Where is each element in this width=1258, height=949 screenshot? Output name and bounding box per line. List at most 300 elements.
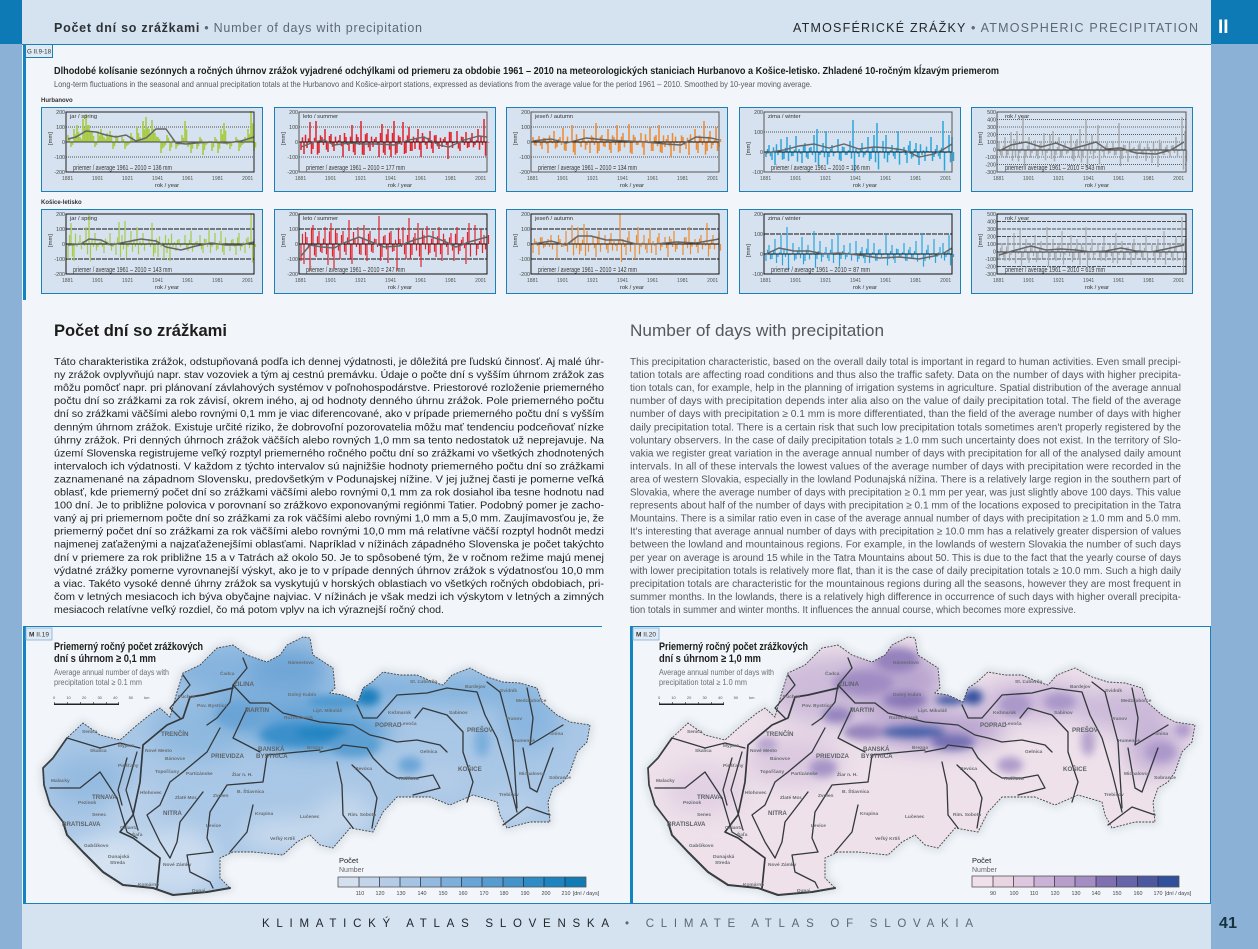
legend: number of days purple: Počet: [972, 856, 992, 865]
map place names: Zlaté Mor.: [780, 795, 802, 801]
chart: Hurbanovo annual: -300: [985, 170, 996, 176]
left margin band: [0, 44, 22, 949]
map place names: Lipt. Mikuláš: [313, 708, 342, 714]
chart: Hurbanovo annual: 300: [987, 125, 996, 131]
chart section strip: [23, 44, 26, 300]
text block: English body: precipitation totals are characteristic for the mountainous regions during all the seasons, however they are most frequent in: [630, 579, 1181, 590]
chart section title: Dlhodobé kolísanie sezónnych a ročných úhrnov zrážok vyjadrené odchýlkami od priemeru za obdobie 1961 – 2010 na meteorologických staniciach Hurbanovo a Košice-letisko. Zhladené 10-ročným kĺzavým priemerom: [54, 63, 999, 77]
chart: Kosice annual: [mm]: [978, 234, 984, 247]
chart: Kosice annual: 400: [987, 220, 996, 226]
map place names: Levice: [811, 823, 826, 829]
map place names: Bánovce: [165, 756, 185, 762]
map place names: Dolný Kubín: [893, 692, 921, 698]
map place names: Senec: [92, 812, 106, 818]
text block: Slovak body: zaznamenané na západnom Slovensku, predovšetkým v Podunajskej nížine. V jej južnej časti je pomerne veľká: [54, 474, 604, 485]
chart: Hurbanovo winter: [mm]: [746, 142, 752, 155]
text block: English body: This precipitation characteristic, based on the overall daily total is important in regard to human activities. Even small precipi-: [630, 357, 1181, 368]
text block: Slovak body: úhrny zrážok. Pri denných úhrnoch zrážok väčších alebo rovných 1,0 mm sa tento nedostatok už neprejavuje. Na: [54, 435, 604, 446]
chart: Hurbanovo annual: 0: [993, 148, 996, 154]
legend: number of days purple: [dní / days]: [1165, 891, 1192, 897]
map place names: Námestovo: [288, 660, 314, 666]
text block: Slovak body: priemerný počet dní so zrážkami za rok väčšími alebo rovnými 10,0 mm má relatívne väčší rozptyl hodnôt medzi: [54, 527, 604, 538]
chart: Kosice annual: 0: [993, 250, 996, 256]
legend: number of days purple: 170: [1154, 891, 1162, 897]
map: Slovakia purple field: [648, 637, 1195, 895]
map place names: Čadca: [220, 670, 235, 677]
map place names: Skalica: [695, 748, 712, 754]
map place names: Hlohovec: [745, 790, 767, 796]
map place names: Bánovce: [770, 756, 790, 762]
chart: Kosice annual: 1881 1901 1921 1941 1961 1981 2001: [993, 278, 1184, 284]
chart: Kosice autumn: 1881 1901 1921 1941 1961 1981 2001: [527, 278, 718, 284]
chart: Hurbanovo spring: 1881 1901 1921 1941 1961 1981 2001: [62, 176, 253, 182]
map place names: Krupina: [860, 811, 878, 817]
chart: Kosice autumn: -200: [519, 272, 530, 278]
text block: Slovak body: ny zrážok ovplyvňujú napr. stav vozoviek a tým aj cestnú premávku. Údaje o počte dní s vyšším úhrnom zrážok zas: [54, 368, 604, 381]
map place names: Bardejov: [1070, 684, 1091, 690]
map place names: NITRA: [163, 810, 182, 817]
chart: Kosice autumn: 0: [527, 242, 530, 248]
chart: Hurbanovo annual: 500: [987, 110, 996, 116]
chart: Hurbanovo annual: 100: [987, 140, 996, 146]
chart: Kosice autumn: priemer / average 1961 – 2010 = 142 mm: [538, 267, 637, 274]
legend: number of days blue: 170: [480, 891, 488, 897]
map place names: Dunajská: [108, 854, 130, 860]
map place names: BYSTRICA: [256, 753, 288, 760]
text block: Slovak body: oblasť, kde priemerný počet dní so zrážkami väčšími alebo rovnými 0,1 mm za rok dosiahol iba tesne hodnotu nad: [54, 488, 604, 498]
chart: Kosice annual: 100: [987, 242, 996, 248]
chart: Kosice summer: 100: [289, 227, 298, 233]
chart: Hurbanovo spring: [42, 108, 262, 192]
map place names: KOŠICE: [458, 765, 482, 773]
chart: Hurbanovo annual: -100: [985, 155, 996, 161]
chart: Kosice winter: [mm]: [746, 244, 752, 257]
chart: Hurbanovo summer: 0: [295, 140, 298, 146]
chart: Kosice spring: 100: [56, 227, 65, 233]
map place names: Nové Zámky: [768, 862, 797, 868]
text block: English body: [629, 357, 1182, 616]
map subtitle second line: precipitation total ≥ 0.1 mm: [54, 678, 142, 687]
chapter number: II: [1218, 17, 1229, 38]
map place names: Gelnica: [1025, 749, 1043, 755]
map place names: Gabčíkovo: [84, 843, 109, 849]
chart: Hurbanovo spring: priemer / average 1961 – 2010 = 136 mm: [73, 165, 172, 172]
chart: Kosice winter: -100: [752, 272, 763, 278]
chart: Kosice annual: priemer / average 1961 – 2010 = 619 mm: [1005, 267, 1105, 274]
header band: [0, 0, 1258, 45]
chart: Hurbanovo autumn: -100: [519, 155, 530, 161]
map panel frames: [23, 626, 1211, 904]
chart: Kosice winter: 0: [760, 252, 763, 258]
text block: Slovak body: Táto charakteristika zrážok, odstupňovaná podľa ich dennej výdatnosti, je dôležitá pre ľudskú činnosť. Aj malé úhr-: [54, 357, 604, 368]
map place names: Rožňava: [399, 776, 419, 782]
chart: Hurbanovo winter: 200: [754, 110, 763, 116]
map title second line: dní s úhrnom ≥ 0,1 mm: [54, 653, 156, 665]
heading: Slovak text: Počet dní so zrážkami: [54, 322, 227, 340]
text block: Slovak body: čom v letných mesiacoch ich býva obyčajne najviac. V nížinách je však medzi ich výskytom v letných a zimných: [54, 592, 604, 603]
map place names: Svidník: [500, 688, 517, 694]
map place names: Humenné: [513, 738, 535, 744]
text block: English body: with lower precipitation totals is relatively more flat, than it is the case of daily precipitation totals ≥ 10.0 mm. Such a high daily: [629, 566, 1181, 577]
text block: English body: area of western Slovakia, especially in the lowland Podunajská nížina. There is a relatively large region in the southern part of: [630, 474, 1181, 485]
chart: Kosice spring: [mm]: [48, 234, 54, 247]
map place names: POPRAD: [980, 722, 1007, 729]
chart: Kosice autumn: 200: [521, 212, 530, 218]
chart: Kosice annual: -300: [985, 272, 996, 278]
map panel: days with precipitation at least 0.1 mm: [26, 628, 600, 897]
map place names: [51, 660, 571, 894]
heading: English text: Number of days with precipitation: [630, 321, 884, 340]
map place names: ŽILINA: [839, 680, 859, 688]
map place names: Medzilaborce: [516, 698, 547, 704]
map place names: Hlohovec: [140, 790, 162, 796]
chart: Hurbanovo winter: zima / winter: [768, 114, 801, 120]
legend: number of days blue: 130: [396, 891, 406, 897]
graph label: G II.9-18: [27, 48, 51, 56]
map place names: Sobrance: [549, 775, 571, 781]
chart: Hurbanovo spring: 200: [56, 110, 65, 116]
chart: Kosice annual: -200: [985, 264, 996, 270]
legend: number of days purple: [972, 856, 1192, 897]
map place names: TRENČÍN: [161, 730, 189, 738]
map place names: Galanta: [120, 825, 138, 831]
map place names: Trebišov: [499, 792, 519, 798]
map place names: Sobrance: [1154, 775, 1176, 781]
map place names: Zvolen: [818, 793, 834, 799]
chart: Kosice winter: zima / winter: [768, 216, 801, 222]
chart: Hurbanovo annual: rok / year: [1005, 114, 1029, 120]
chart: Kosice spring: 0: [62, 242, 65, 248]
map place names: Nové Zámky: [163, 862, 192, 868]
map place names: Senica: [687, 729, 703, 735]
map place names: Topoľčany: [760, 769, 784, 775]
chart: Hurbanovo autumn: 0: [527, 140, 530, 146]
map place names: Dolný Kubín: [288, 692, 316, 698]
chart: Kosice spring: priemer / average 1961 – 2010 = 143 mm: [73, 267, 172, 274]
map place names: Trebišov: [1104, 792, 1124, 798]
map title: Priemerný ročný počet zrážkových: [659, 641, 808, 653]
map title second line: dní s úhrnom ≥ 1,0 mm: [659, 653, 761, 665]
map place names: BANSKÁ: [863, 746, 890, 753]
chart: Kosice annual: 300: [987, 227, 996, 233]
chart: Kosice winter: 100: [754, 232, 763, 238]
map place names: B. Štiavnica: [237, 787, 265, 795]
map place names: Svidník: [1105, 688, 1122, 694]
map place names: Púchov: [178, 694, 196, 700]
map place names: Michalovce: [519, 771, 545, 777]
chart: Hurbanovo autumn: -200: [519, 170, 530, 176]
map place names: Lipt. Mikuláš: [918, 708, 947, 714]
map place names: BYSTRICA: [861, 753, 893, 760]
map place names: St. Ľubovňa: [410, 679, 438, 685]
map scale bar: 0 10 20 30 40 50 km: [53, 695, 150, 700]
text block: Slovak body: 100 dní. Je to približne polovica v porovnaní so zrážkovo exponovanými regiónmi Tatier. Podobný pomer je zacho-: [54, 501, 604, 512]
map place names: Humenné: [1118, 738, 1140, 744]
chart: Kosice summer: priemer / average 1961 – 2010 = 247 mm: [306, 267, 405, 274]
map place names: Snina: [550, 731, 563, 737]
map place names: Revúca: [355, 766, 372, 772]
map place names: Piešťany: [723, 763, 744, 769]
station label Kosice: Košice-letisko: [41, 200, 82, 206]
legend: number of days purple: 110: [1030, 891, 1038, 897]
map scale bar: 0 10 20 30 40 50 km: [658, 695, 755, 700]
chart: Hurbanovo spring: 100: [56, 125, 65, 131]
map place names: Levoča: [400, 721, 417, 727]
text block: English body: tion totals in summer and winter months. It influences the annual course, which becomes more expressive.: [630, 605, 1076, 616]
chart: Kosice spring: 1881 1901 1921 1941 1961 1981 2001: [62, 278, 253, 284]
chart: Hurbanovo spring: rok / year: [155, 183, 179, 189]
chart: Hurbanovo annual: 1881 1901 1921 1941 1961 1981 2001: [993, 176, 1184, 182]
map place names: Streda: [110, 860, 125, 866]
chart: Kosice winter: rok / year: [853, 285, 877, 291]
map place names: Gelnica: [420, 749, 438, 755]
chart: Kosice autumn: [mm]: [513, 234, 519, 247]
map place names: B. Štiavnica: [842, 787, 870, 795]
map place names: Levoča: [1005, 721, 1022, 727]
map place names: Sabinov: [1054, 710, 1073, 716]
map place names: Rožňava: [1004, 776, 1024, 782]
map place names: Kežmarok: [388, 710, 411, 716]
legend: number of days blue: Number: [339, 867, 365, 874]
text block: English body: between the lowland and mountainous regions. For example, in the lowlands of western Slovakia the number of such days: [630, 540, 1181, 551]
chart: Hurbanovo winter: 100: [754, 130, 763, 136]
chart: Hurbanovo summer: -200: [287, 170, 298, 176]
chart: Hurbanovo annual: 200: [987, 132, 996, 138]
map place names: Zlaté Mor.: [175, 795, 197, 801]
map place names: Pezinok: [78, 800, 96, 806]
map scale bar: [658, 695, 755, 705]
map subtitle: Average annual number of days with: [54, 668, 169, 677]
legend: number of days purple: 140: [1092, 891, 1100, 897]
map place names: TRNAVA: [92, 794, 117, 801]
text block: English body: intervals. In all of these intervals the lowest values of the average number of days with precipitation were recorded in the: [630, 461, 1181, 472]
chart: Hurbanovo summer: [274, 108, 496, 192]
text block: Slovak body: dní v priemere za rok približne 15 a v Tatrách až okolo 50. Je to spôsobené tým, že v ročnom režime majú menej: [54, 553, 604, 564]
chart: Kosice winter: 200: [754, 212, 763, 218]
chart: Kosice annual: rok / year: [1005, 216, 1029, 222]
text block: Slovak body: území Slovenska registrujeme veľký rozptyl priemerného ročného počtu dní so zrážkami vo všetkých zhodnotených: [54, 448, 604, 459]
map place names: Pov. Bystrica: [802, 703, 832, 709]
map label: M II.19: [29, 632, 49, 638]
legend: number of days blue: 120: [376, 891, 384, 897]
chart: Hurbanovo annual: rok / year: [1085, 183, 1109, 189]
footer title: KLIMATICKÝ ATLAS SLOVENSKA • CLIMATE ATLAS OF SLOVAKIA: [262, 917, 973, 930]
map place names: Streda: [715, 860, 730, 866]
footer band: [22, 903, 1211, 949]
text block: Slovak body: môžu pomôcť napr. pri plánovaní závlahových systémov v poľnohospodárstve. Priestorové rozloženie priemerného: [54, 383, 604, 394]
map place names: Vranov: [1111, 716, 1127, 722]
map place names: Medzilaborce: [1121, 698, 1152, 704]
text block: Slovak body: dní so zrážkami väčšími alebo rovnými 0,1 mm je viac diferencované, ako v prípade priemerného počtu dní s vyšším: [54, 409, 604, 420]
text block: English body: number of days with precipitation ≥ 0.1 mm is more differentiated, than the field of the average number of days with higher: [630, 409, 1182, 420]
text block: Slovak body: [54, 357, 604, 616]
legend: number of days purple: 130: [1072, 891, 1080, 897]
section heading right: ATMOSFÉRICKÉ ZRÁŽKY • ATMOSPHERIC PRECIPITATION: [793, 20, 1198, 35]
map place names: Krupina: [255, 811, 273, 817]
text block: English body: daily precipitation total. There is a certain risk that such low precipitation totals sometimes aren't properly registered by the: [630, 422, 1181, 433]
map place names: Sabinov: [449, 710, 468, 716]
chart: Kosice annual: 500: [987, 212, 996, 218]
map place names: Levice: [206, 823, 221, 829]
text block: Slovak body: počtu dní so zrážkami za rok závisí, okrem iného, aj od hodnoty denného úhrnu zrážok. Pole priemerného počtu: [54, 396, 604, 407]
map place names: Žiar n. H.: [837, 770, 858, 778]
legend: number of days blue: [dní / days]: [573, 891, 600, 897]
map place names: ŽILINA: [234, 680, 254, 688]
legend: number of days blue: 200: [542, 891, 550, 897]
chart: Kosice annual: 200: [987, 234, 996, 240]
map place names: Ružomberok: [889, 715, 918, 721]
text block: Slovak body: vaný aj pri priemernom počte dní so zrážkami za rok väčšími alebo rovnými 1,0 mm a 5,0 mm. Zaujímavosťou je, že: [54, 514, 604, 525]
chart section subtitle: Long-term fluctuations in the seasonal and annual precipitation totals at the Hurbanovo and Košice-airport stations, expressed as deviations from the average value for the period 1961 – 2010. Smoothed by 10-year moving average.: [54, 79, 812, 89]
map place names: Vranov: [506, 716, 522, 722]
legend: number of days blue: 210: [562, 891, 570, 897]
chart: Hurbanovo winter: rok / year: [853, 183, 877, 189]
map place names: Veľký Krtíš: [270, 836, 295, 842]
chart: Hurbanovo spring: [mm]: [48, 132, 54, 145]
chart: Kosice summer: rok / year: [388, 285, 412, 291]
map place names: Nové Mesto: [145, 748, 172, 754]
map place names: Skalica: [90, 748, 107, 754]
chart: Kosice annual: [972, 210, 1192, 294]
map place names: BRATISLAVA: [667, 821, 706, 828]
chart: Kosice summer: [274, 210, 496, 294]
graph label: [26, 44, 52, 58]
legend: number of days blue: 110: [356, 891, 364, 897]
map place names: Partizánske: [791, 771, 818, 777]
chart: Kosice summer: 200: [289, 212, 298, 218]
text block: English body: tion totals can, for example, help in the planning of irrigation systems in agriculture. Spatial distribution of the average annual: [630, 383, 1181, 394]
map place names: TRNAVA: [697, 794, 722, 801]
text block: English body: vakia we register great variation in the average annual number of days with precipitation for all of the analysed daily amount: [630, 448, 1181, 459]
map place names: Lučenec: [905, 814, 925, 820]
map title: Priemerný ročný počet zrážkových: [54, 641, 203, 653]
map place names: Malacky: [656, 778, 675, 784]
chart: Hurbanovo summer: [mm]: [281, 132, 287, 145]
map place names: NITRA: [768, 810, 787, 817]
legend: number of days blue: 190: [520, 891, 530, 897]
map place names: Žiar n. H.: [232, 770, 253, 778]
chart: Hurbanovo autumn: [mm]: [513, 132, 519, 145]
map place names: Šaľa: [132, 830, 143, 838]
legend: number of days blue: 180: [500, 891, 508, 897]
legend: number of days blue: [338, 856, 600, 897]
chart: Kosice spring: -100: [54, 257, 65, 263]
map place names: Revúca: [960, 766, 977, 772]
chart: Hurbanovo winter: -100: [752, 170, 763, 176]
legend: number of days purple: 100: [1010, 891, 1018, 897]
chart: Kosice summer: [mm]: [281, 234, 287, 247]
map place names: Bardejov: [465, 684, 486, 690]
legend: number of days purple: 150: [1112, 891, 1122, 897]
chart: Kosice summer: leto / summer: [303, 216, 338, 222]
chart: Kosice summer: 1881 1901 1921 1941 1961 1981 2001: [295, 278, 486, 284]
map place names: BRATISLAVA: [62, 821, 101, 828]
map place names: Šaľa: [737, 830, 748, 838]
map place names: Pezinok: [683, 800, 701, 806]
text block: English body: Slovakia, where the average number of days with precipitation ≥ 0.1 mm per year, was just slightly above 100 days. This value: [630, 488, 1181, 498]
chart: Hurbanovo autumn: 100: [521, 125, 530, 131]
chart: Hurbanovo spring: 0: [62, 140, 65, 146]
map subtitle second line: precipitation total ≥ 1.0 mm: [659, 678, 747, 687]
map place names: Komárno: [138, 882, 159, 888]
chart: Kosice spring: jar / spring: [69, 216, 97, 222]
legend: number of days blue: 160: [458, 891, 468, 897]
map scale bar: [53, 695, 150, 705]
chart: Hurbanovo autumn: 200: [521, 110, 530, 116]
map place names: Zvolen: [213, 793, 229, 799]
text block: English body: voluntary observers. In the case of daily precipitation totals ≥ 1.0 mm such uncertainty does not exist. In the territory of Slo-: [630, 435, 1181, 446]
map place names: Rim. Sobota: [348, 812, 376, 818]
map label: [26, 628, 52, 640]
chart: Kosice annual: rok / year: [1085, 285, 1109, 291]
map subtitle: Average annual number of days with: [659, 668, 774, 677]
map place names: Snina: [1155, 731, 1168, 737]
map place names: POPRAD: [375, 722, 402, 729]
map place names: TRENČÍN: [766, 730, 794, 738]
chart: Hurbanovo summer: rok / year: [388, 183, 412, 189]
chart: Hurbanovo annual: 400: [987, 118, 996, 124]
map place names: Myjava: [723, 743, 739, 749]
chart: Hurbanovo winter: 1881 1901 1921 1941 1961 1981 2001: [760, 176, 951, 182]
map place names: Kežmarok: [993, 710, 1016, 716]
chart: Hurbanovo winter: 0: [760, 150, 763, 156]
legend: number of days blue: 150: [438, 891, 448, 897]
text block: English body: represents about half of the number of days with precipitation ≥ 0.1 mm of the locations exposed to precipitation in the Tatra: [630, 501, 1181, 512]
map place names: Brezno: [307, 745, 323, 751]
text block: English body: Mountains. There is a similar ratio even in case of the average annual number of days with precipitation ≥ 1.0 mm and 5.0 mm.: [630, 514, 1181, 525]
chart: Kosice spring: rok / year: [155, 285, 179, 291]
chart: Hurbanovo summer: 100: [289, 125, 298, 131]
chart: Hurbanovo spring: -200: [54, 170, 65, 176]
map place names: Malacky: [51, 778, 70, 784]
map place names: Komárno: [743, 882, 764, 888]
map place names: MARTIN: [850, 707, 875, 714]
chart: Hurbanovo summer: leto / summer: [303, 114, 338, 120]
chart: Kosice spring: [42, 210, 262, 294]
text block: Slovak body: intervaloch ich výdatnosti. V každom z týchto intervalov sú najnižšie hodnoty priemerného počtu dní so zrážkami: [54, 461, 604, 472]
map label: M II.20: [636, 632, 656, 638]
chart: Kosice summer: -200: [287, 272, 298, 278]
chart: Hurbanovo winter: priemer / average 1961 – 2010 = 106 mm: [771, 165, 870, 172]
text block: Slovak body: denným úhrnom zrážok. Existuje určité riziko, že dobrovoľní pozorovatelia môžu mať tendenciu podceňovať nízke: [54, 422, 604, 433]
map place names: KOŠICE: [1063, 765, 1087, 773]
map label: [633, 628, 659, 640]
station label Hurbanovo: Hurbanovo: [41, 98, 73, 104]
chart: Hurbanovo spring: jar / spring: [69, 114, 97, 120]
chart: Kosice summer: 0: [295, 242, 298, 248]
map place names: Veľký Krtíš: [875, 836, 900, 842]
map place names: Čadca: [825, 670, 840, 677]
page heading left: Počet dní so zrážkami • Number of days with precipitation: [54, 21, 422, 35]
map place names: Senec: [697, 812, 711, 818]
chart: Hurbanovo autumn: [506, 108, 728, 192]
chart: Kosice autumn: -100: [519, 257, 530, 263]
chart: Kosice spring: -200: [54, 272, 65, 278]
chart: Kosice annual: -100: [985, 257, 996, 263]
map place names: Lučenec: [300, 814, 320, 820]
map place names: MARTIN: [245, 707, 270, 714]
text block: Slovak body: mesiacoch relatívne veľký rozdiel, čo má potom vplyv na ich výraznejší ročný chod.: [54, 605, 444, 616]
map place names: Piešťany: [118, 763, 139, 769]
map place names: [656, 660, 1176, 894]
chart: Hurbanovo autumn: rok / year: [620, 183, 644, 189]
text block: Slovak body: a viac. Takéto vysoké denné úhrny zrážok sa vyskytujú v horských oblastiach vo všetkých ročných obdobiach, pri-: [54, 579, 604, 590]
text block: English body: summer months. In the lowlands, there is a relatively high difference in occurrence of such days with higher overall precipita-: [630, 592, 1181, 603]
map: Slovakia blue field: [43, 637, 590, 897]
text block: English body: It's interesting that average annual number of days with precipitation ≥ 10.0 mm has a relatively greater dispersion of values: [630, 527, 1181, 538]
text block: English body: number of days with precipitation depends inter alia also on the value of daily precipitation total. The field of the average: [630, 396, 1181, 407]
chart: Kosice winter: [740, 210, 960, 294]
